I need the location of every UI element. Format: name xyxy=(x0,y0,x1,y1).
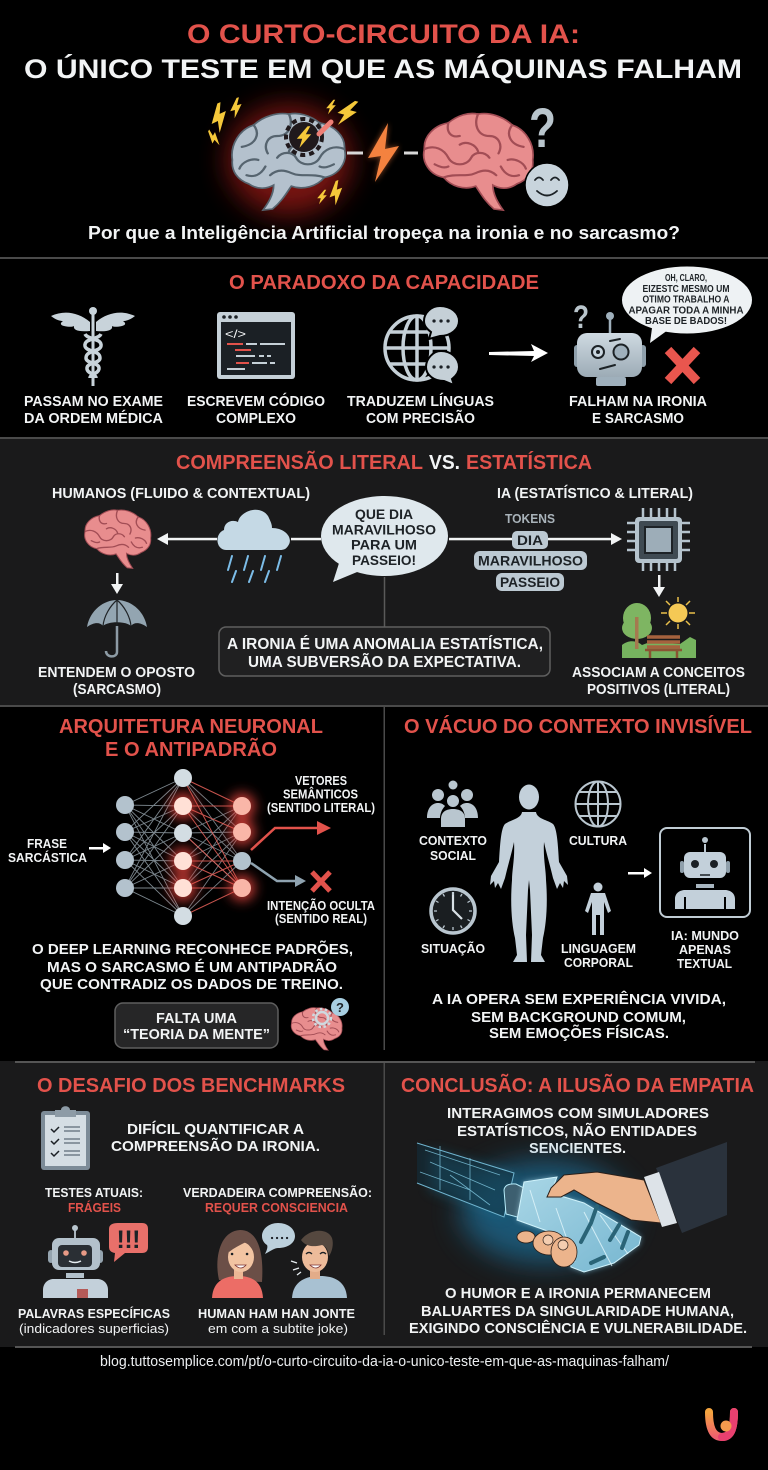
label: current tests fragile: FRÁGEIS xyxy=(68,1200,121,1215)
icon: rain cloud xyxy=(217,510,290,582)
tokens: TOKENS xyxy=(505,511,555,526)
label: understand the opposite xyxy=(38,665,195,698)
label: sarcastic phrase xyxy=(8,837,87,865)
text: deep learning xyxy=(32,940,353,993)
label: positive concepts: ASSOCIAM A CONCEITOS xyxy=(572,665,745,681)
label: hidden intent: (SENTIDO REAL) xyxy=(275,912,367,926)
neural network diagram xyxy=(116,769,255,925)
label: true understanding xyxy=(183,1185,372,1215)
text: deep learning: O DEEP LEARNING RECONHECE PADRÕES, xyxy=(32,940,353,958)
subheading: AI: IA (ESTATÍSTICO & LITERAL) xyxy=(497,485,693,502)
illustration: human brain, question mark, smiley xyxy=(424,96,569,210)
label: translation xyxy=(347,393,494,427)
panel: literal vs statistical xyxy=(0,437,768,706)
label: specific words: PALAVRAS ESPECÍFICAS xyxy=(18,1306,170,1321)
illustration: human brain, question mark, smiley: ? xyxy=(529,96,556,159)
icon: red cross xyxy=(668,350,697,381)
subtitle: Por que a Inteligência Artificial tropeça na ironia e no sarcasmo? xyxy=(88,223,680,243)
label: complex code: COMPLEXO xyxy=(216,411,296,427)
icon: confused robot xyxy=(573,299,646,386)
red output arrow xyxy=(251,821,331,850)
label: specific words xyxy=(18,1306,170,1336)
label: current tests fragile xyxy=(45,1186,143,1215)
label: semantic vectors: SEMÂNTICOS xyxy=(283,786,358,802)
text: statistical simulators: SENCIENTES. xyxy=(529,1140,626,1157)
icon: umbrella xyxy=(87,600,147,656)
label: positive concepts: POSITIVOS (LITERAL) xyxy=(587,682,730,698)
speech bubble: sarcastic remark: BASE DE BADOS! xyxy=(645,315,727,327)
label: true understanding: REQUER CONSCIENCIA xyxy=(205,1201,348,1215)
icon: code window xyxy=(217,312,295,379)
tokens: PASSEIO xyxy=(500,574,560,590)
text: humor and irony: BALUARTES DA SINGULARIDADE HUMANA, xyxy=(421,1303,734,1320)
icon: confused robot: ? xyxy=(573,299,589,335)
callout: theory of mind: FALTA UMA xyxy=(156,1010,237,1027)
arrow to failure xyxy=(489,344,548,362)
panel: neural architecture xyxy=(8,716,375,1050)
label: text-only world xyxy=(671,929,739,971)
label: translation: TRADUZEM LÍNGUAS xyxy=(347,393,494,410)
heading: VS. xyxy=(429,452,460,474)
label: text-only world: IA: MUNDO xyxy=(671,929,739,943)
icon: red cross xyxy=(312,872,330,891)
panel: invisible context xyxy=(404,715,752,1042)
panel: header xyxy=(24,19,742,243)
label: fail at irony: FALHAM NA IRONIA xyxy=(569,394,708,410)
text: hard to quantify xyxy=(111,1121,320,1155)
tokens: MARAVILHOSO xyxy=(478,552,583,568)
heading: O PARADOXO DA CAPACIDADE xyxy=(229,272,539,294)
label: human joke: em com a subtite joke) xyxy=(208,1322,348,1336)
tokens xyxy=(474,511,587,591)
text: no lived experience: SEM BACKGROUND COMUM, xyxy=(471,1009,686,1026)
text: no lived experience xyxy=(432,990,726,1042)
speech bubble: sarcastic remark: OTIMO TRABALHO A xyxy=(642,294,730,306)
label: text-only world: TEXTUAL xyxy=(677,957,732,971)
speech bubble: sarcastic remark: EIZESTC MESMO UM xyxy=(642,283,730,295)
text: humor and irony: O HUMOR E A IRONIA PERMANECEM xyxy=(445,1285,711,1302)
speech bubble: what a wonderful day: QUE DIA xyxy=(355,506,413,522)
speech bubble: sarcastic remark: OH, CLARO, xyxy=(665,272,707,284)
source URL: blog.tuttosemplice.com/pt/o-curto-circuito-da-ia-o-unico-teste-em-que-as-maquinas-falham/ xyxy=(100,1353,670,1370)
label: current tests fragile: TESTES ATUAIS: xyxy=(45,1186,143,1200)
callout: irony as anomaly xyxy=(219,627,550,676)
label: body language xyxy=(561,942,636,970)
icon: clipboard xyxy=(41,1106,90,1170)
text: statistical simulators xyxy=(447,1105,709,1157)
text: statistical simulators: ESTATÍSTICOS, NÃO ENTIDADES xyxy=(457,1122,697,1140)
heading: ESTATÍSTICA xyxy=(466,451,592,474)
icon: robot in a box xyxy=(660,828,750,917)
label: fail at irony xyxy=(569,394,708,427)
label: semantic vectors: VETORES xyxy=(295,774,347,788)
label: understand the opposite: ENTENDEM O OPOSTO xyxy=(38,665,195,681)
label: human joke xyxy=(198,1307,355,1336)
icon: chip xyxy=(627,508,690,571)
label: semantic vectors: (SENTIDO LITERAL) xyxy=(267,801,375,815)
icon: woman and man talking xyxy=(212,1223,347,1298)
text: hard to quantify: COMPREENSÃO DA IRONIA. xyxy=(111,1137,320,1155)
label: culture: CULTURA xyxy=(569,834,627,848)
text: humor and irony: EXIGINDO CONSCIÊNCIA E VULNERABILIDADE. xyxy=(409,1319,747,1337)
logo xyxy=(709,1412,734,1437)
speech bubble: what a wonderful day: PARA UM xyxy=(351,536,417,552)
speech bubble: what a wonderful day: MARAVILHOSO xyxy=(332,522,436,538)
speech bubble: sarcastic remark xyxy=(622,266,752,343)
text: humor and irony xyxy=(409,1285,747,1337)
illustration: robot and human handshake xyxy=(417,1142,727,1272)
text: statistical simulators: INTERAGIMOS COM SIMULADORES xyxy=(447,1105,709,1122)
icon: human silhouette xyxy=(490,784,568,962)
label: hidden intent: INTENÇÃO OCULTA xyxy=(267,898,375,913)
label: fail at irony: E SARCASMO xyxy=(592,411,684,427)
label: positive concepts xyxy=(572,665,745,698)
input arrow xyxy=(89,843,111,853)
icon: alert bubble xyxy=(109,1223,148,1262)
icon: clock xyxy=(431,889,475,933)
label: sarcastic phrase: FRASE xyxy=(27,837,67,851)
panel: paradox of capacity xyxy=(24,266,752,427)
icon: happy robot xyxy=(43,1225,108,1298)
heading: CONCLUSÃO: A ILUSÃO DA EMPATIA xyxy=(401,1074,754,1097)
label: true understanding: VERDADEIRA COMPREENSÃO: xyxy=(183,1185,372,1200)
icon: code window: </> xyxy=(225,327,246,341)
illustration: short-circuit brain xyxy=(204,97,359,215)
text: hard to quantify: DIFÍCIL QUANTIFICAR A xyxy=(127,1121,304,1138)
heading: ARQUITETURA NEURONAL xyxy=(59,716,323,738)
tokens: DIA xyxy=(517,532,543,548)
label: medical exam: DA ORDEM MÉDICA xyxy=(24,410,164,427)
icon: brain with gear and question xyxy=(291,998,349,1050)
heading xyxy=(176,451,592,474)
heading: O VÁCUO DO CONTEXTO INVISÍVEL xyxy=(404,715,752,738)
subheading: humans: HUMANOS (FLUIDO & CONTEXTUAL) xyxy=(52,486,310,502)
heading: COMPREENSÃO LITERAL xyxy=(176,451,423,474)
label: body language: CORPORAL xyxy=(564,956,633,970)
arrow to AI box xyxy=(628,868,652,878)
callout: irony as anomaly: UMA SUBVERSÃO DA EXPECTATIVA. xyxy=(248,653,521,671)
icon: globe with speech bubbles xyxy=(385,306,459,385)
icon: globe xyxy=(576,782,620,826)
icon: human brain xyxy=(85,510,151,568)
icon: caduceus xyxy=(51,307,135,386)
label: text-only world: APENAS xyxy=(679,943,731,957)
label: body language: LINGUAGEM xyxy=(561,942,636,956)
icon: park scene xyxy=(622,597,696,658)
callout: theory of mind: “TEORIA DA MENTE” xyxy=(123,1026,270,1043)
text: no lived experience: SEM EMOÇÕES FÍSICAS. xyxy=(489,1024,669,1042)
speech bubble: sarcastic remark: APAGAR TODA A MINHA xyxy=(628,304,744,316)
label: complex code: ESCREVEM CÓDIGO xyxy=(187,392,325,410)
label: translation: COM PRECISÃO xyxy=(366,409,475,427)
label: medical exam xyxy=(24,394,164,427)
title line 1: O CURTO-CIRCUITO DA IA: xyxy=(187,19,580,49)
label: complex code xyxy=(187,392,325,427)
connector line xyxy=(384,577,386,627)
callout: irony as anomaly: A IRONIA É UMA ANOMALIA ESTATÍSTICA, xyxy=(227,636,543,653)
icon: alert bubble: !!! xyxy=(116,1226,140,1254)
callout: theory of mind xyxy=(115,1003,278,1048)
text: deep learning: MAS O SARCASMO É UM ANTIPADRÃO xyxy=(47,958,337,976)
text: no lived experience: A IA OPERA SEM EXPERIÊNCIA VIVIDA, xyxy=(432,990,726,1008)
connector with lightning bolt xyxy=(347,123,418,182)
label: specific words: (indicadores superficias) xyxy=(19,1322,169,1336)
grey output arrow xyxy=(251,863,306,887)
heading: O DESAFIO DOS BENCHMARKS xyxy=(37,1075,345,1097)
speech bubble: what a wonderful day: PASSEIO! xyxy=(352,552,416,568)
panel: benchmarks xyxy=(18,1075,372,1336)
panel: conclusion xyxy=(401,1074,754,1337)
label: understand the opposite: (SARCASMO) xyxy=(73,682,161,698)
label: hidden intent xyxy=(267,898,375,926)
arrow down left xyxy=(111,573,123,594)
label: social context xyxy=(419,834,487,863)
label: social context: SOCIAL xyxy=(430,849,476,863)
icon: small person xyxy=(585,882,611,935)
label: situation: SITUAÇÃO xyxy=(421,941,485,956)
icon: brain with gear and question: ? xyxy=(336,1000,344,1015)
arrow to chip xyxy=(449,533,622,545)
heading xyxy=(59,716,323,761)
title line 2: O ÚNICO TESTE EM QUE AS MÁQUINAS FALHAM xyxy=(24,53,742,84)
label: human joke: HUMAN HAM HAN JONTE xyxy=(198,1307,355,1321)
heading: E O ANTIPADRÃO xyxy=(105,738,277,761)
label: medical exam: PASSAM NO EXAME xyxy=(24,394,163,410)
arrow down right xyxy=(653,575,665,597)
label: semantic vectors xyxy=(267,774,375,815)
label: sarcastic phrase: SARCÁSTICA xyxy=(8,850,87,865)
arrow to brain xyxy=(157,533,321,545)
label: social context: CONTEXTO xyxy=(419,834,487,848)
speech bubble: what a wonderful day xyxy=(321,496,448,582)
icon: group of people xyxy=(427,780,478,827)
text: deep learning: QUE CONTRADIZ OS DADOS DE TREINO. xyxy=(40,976,343,993)
